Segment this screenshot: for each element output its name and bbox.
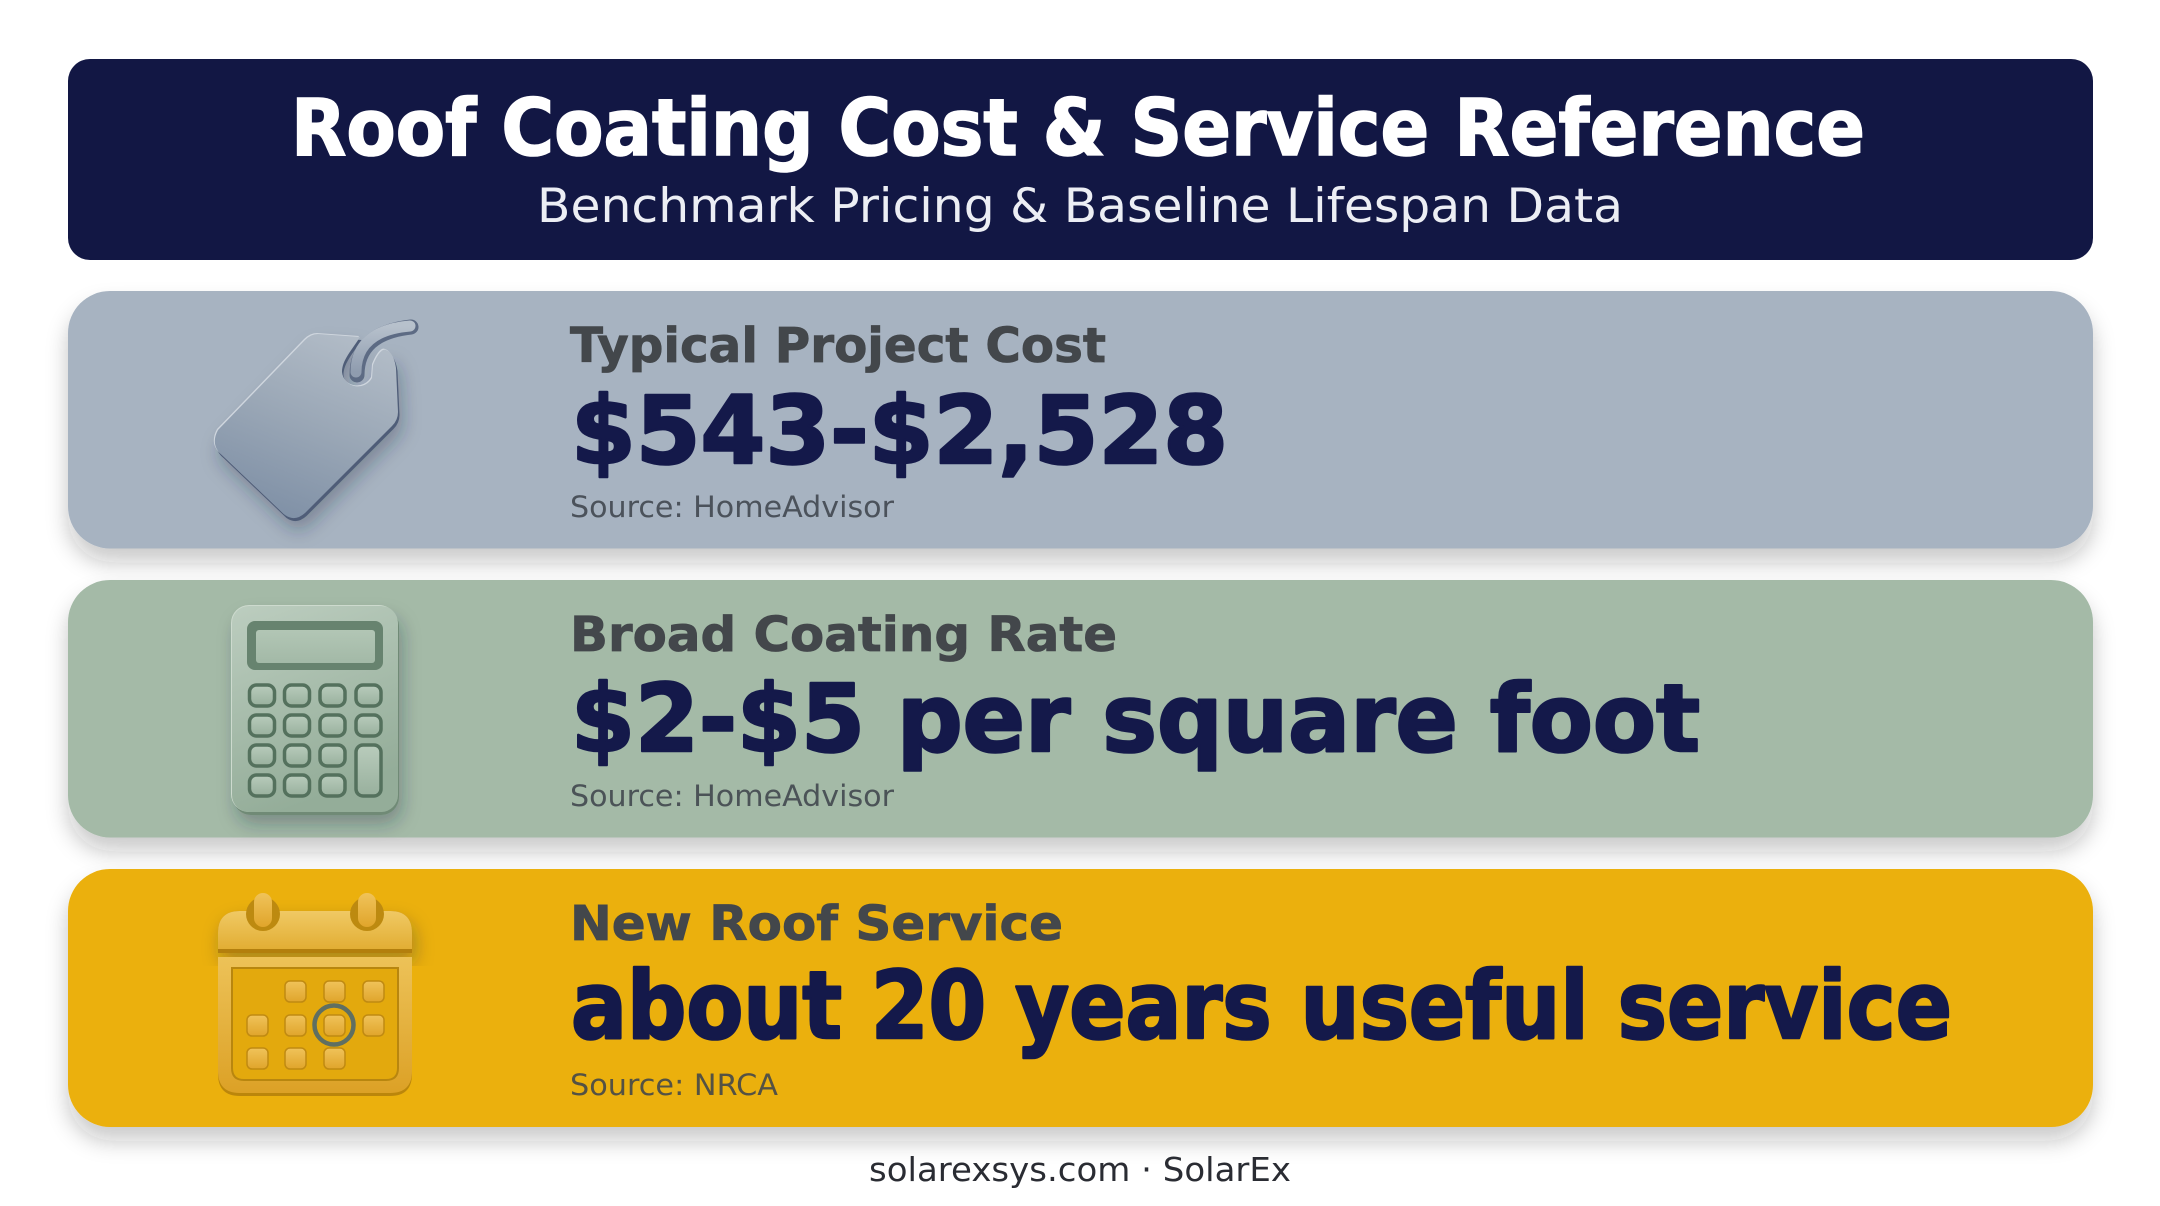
footer: solarexsys.com · SolarEx bbox=[869, 1150, 1291, 1189]
header banner bbox=[68, 59, 2093, 260]
icon: price tag bbox=[214, 326, 411, 521]
source: NRCA: Source: NRCA bbox=[570, 1068, 778, 1102]
panel: new roof service bbox=[68, 869, 2093, 1127]
icon: calculator bbox=[231, 605, 399, 815]
value: rate per square foot: $2-$5 per square foot bbox=[571, 665, 1700, 774]
source: HomeAdvisor: Source: HomeAdvisor bbox=[570, 490, 894, 524]
subtitle: Benchmark Pricing & Baseline Lifespan Data bbox=[537, 179, 1623, 234]
panel: broad coating rate bbox=[68, 580, 2093, 838]
source: HomeAdvisor: Source: HomeAdvisor bbox=[570, 779, 894, 813]
title: Roof Coating Cost & Service Reference bbox=[291, 84, 1865, 174]
value: cost range: $543-$2,528 bbox=[571, 377, 1228, 486]
value: useful service: about 20 years useful service bbox=[571, 952, 1952, 1061]
panel: typical project cost bbox=[68, 291, 2093, 548]
label: typical project cost: Typical Project Cost bbox=[570, 318, 1106, 374]
icon: calendar bbox=[218, 893, 412, 1096]
label: new roof service: New Roof Service bbox=[570, 896, 1063, 952]
label: broad coating rate: Broad Coating Rate bbox=[570, 607, 1117, 663]
